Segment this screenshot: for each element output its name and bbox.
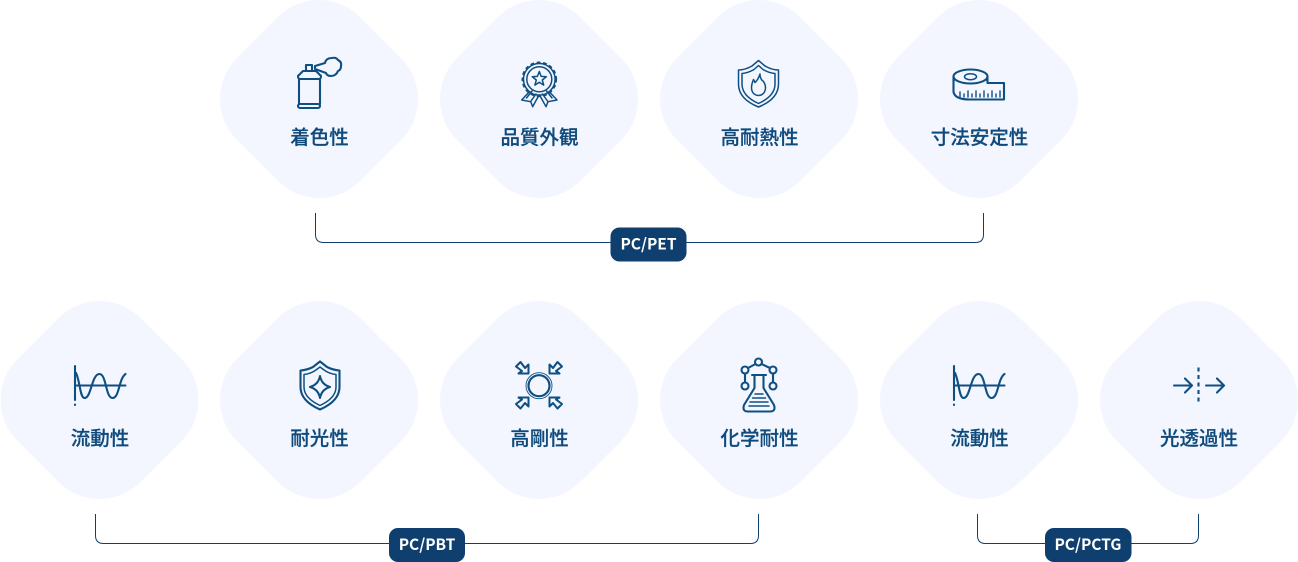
bracket: PC/PET <box>316 213 984 262</box>
icon: flask with molecule <box>742 358 776 412</box>
icon: measuring tape <box>954 70 1004 100</box>
label: 流動性 <box>950 428 1009 450</box>
label: 化学耐性 <box>720 428 799 450</box>
label: 着色性 <box>290 127 349 149</box>
panel: 品質外観 <box>416 0 662 222</box>
icon: light passing through <box>1174 368 1224 402</box>
badge: PC/PET <box>610 228 686 262</box>
panel: 流動性 right <box>856 277 1102 523</box>
icon: compress arrows <box>516 362 562 408</box>
panel: 着色性 <box>196 0 442 222</box>
panel: 高剛性 <box>416 277 662 523</box>
panel: 寸法安定性 <box>856 0 1102 222</box>
badge: PC/PCTG: PC/PCTG <box>1054 533 1122 555</box>
icon: spray can <box>298 58 341 108</box>
badge: PC/PCTG <box>1045 528 1132 562</box>
label: 流動性 <box>71 428 129 450</box>
panel: 光透過性 <box>1076 277 1298 523</box>
badge: PC/PET: PC/PET <box>620 232 677 254</box>
panel: 化学耐性 <box>636 277 882 523</box>
icon: medal <box>522 62 557 107</box>
icon: shield with sparkle <box>300 362 340 410</box>
badge: PC/PBT: PC/PBT <box>399 533 456 555</box>
bracket: PC/PCTG <box>978 514 1198 562</box>
label: 寸法安定性 <box>931 127 1028 149</box>
label: 高剛性 <box>510 428 569 450</box>
label: 品質外観 <box>500 127 579 149</box>
icon: flow wave <box>75 366 126 405</box>
label: 耐光性 <box>290 428 349 450</box>
panel: 高耐熱性 <box>636 0 882 222</box>
label: 高耐熱性 <box>720 127 799 149</box>
panel: 流動性 left <box>0 277 223 523</box>
panel: 耐光性 <box>196 277 442 523</box>
icon: shield with flame <box>738 60 778 107</box>
badge: PC/PBT <box>389 528 465 562</box>
bracket: PC/PBT <box>96 514 758 562</box>
label: 光透過性 <box>1160 428 1238 450</box>
icon: flow wave <box>954 366 1004 405</box>
